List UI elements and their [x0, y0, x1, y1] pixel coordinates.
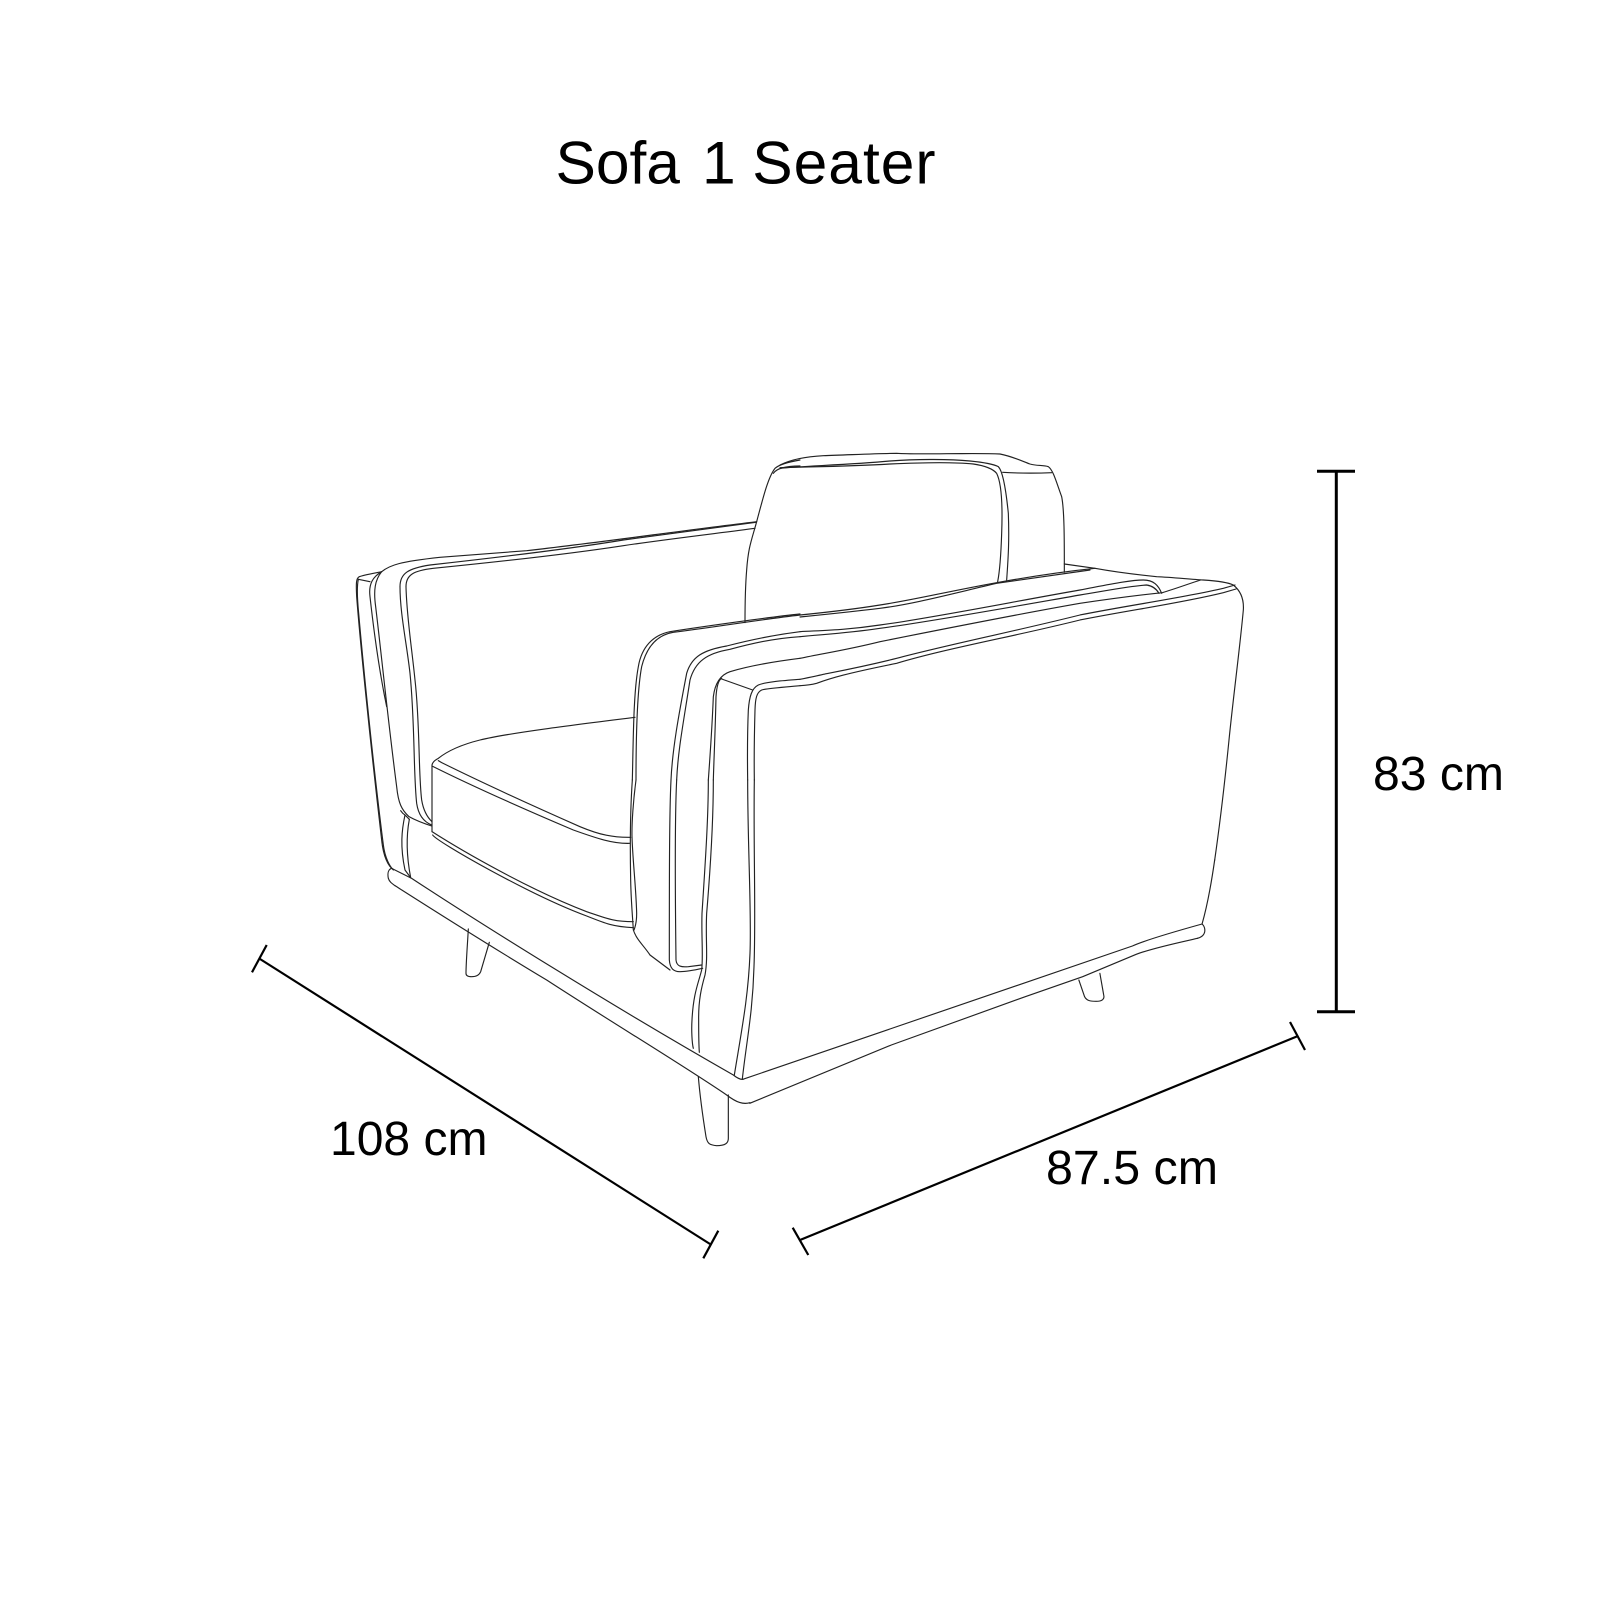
- sofa: back, seat cushion and front arm upper: [356, 460, 800, 870]
- dimension: height 83 cm: 83 cm: [1373, 748, 1504, 801]
- title: 1: [702, 128, 736, 196]
- dimension: depth 108 cm: [252, 945, 718, 1258]
- sofa: right base rail and rear right leg: [743, 860, 1215, 1103]
- sofa: lower front, base rail and legs: [388, 780, 755, 1146]
- title: Seater: [752, 128, 937, 196]
- sofa line drawing: [356, 453, 1243, 1146]
- dimension: width 87.5 cm: [793, 1022, 1305, 1255]
- title: Sofa: [556, 128, 680, 196]
- dimension: width 87.5 cm: 87.5 cm: [1046, 1142, 1218, 1195]
- sofa: right edge of arm panel: [1215, 740, 1229, 860]
- dimension: depth 108 cm: 108 cm: [330, 1113, 488, 1166]
- sofa: back cushion right side and arm top: [780, 453, 1243, 740]
